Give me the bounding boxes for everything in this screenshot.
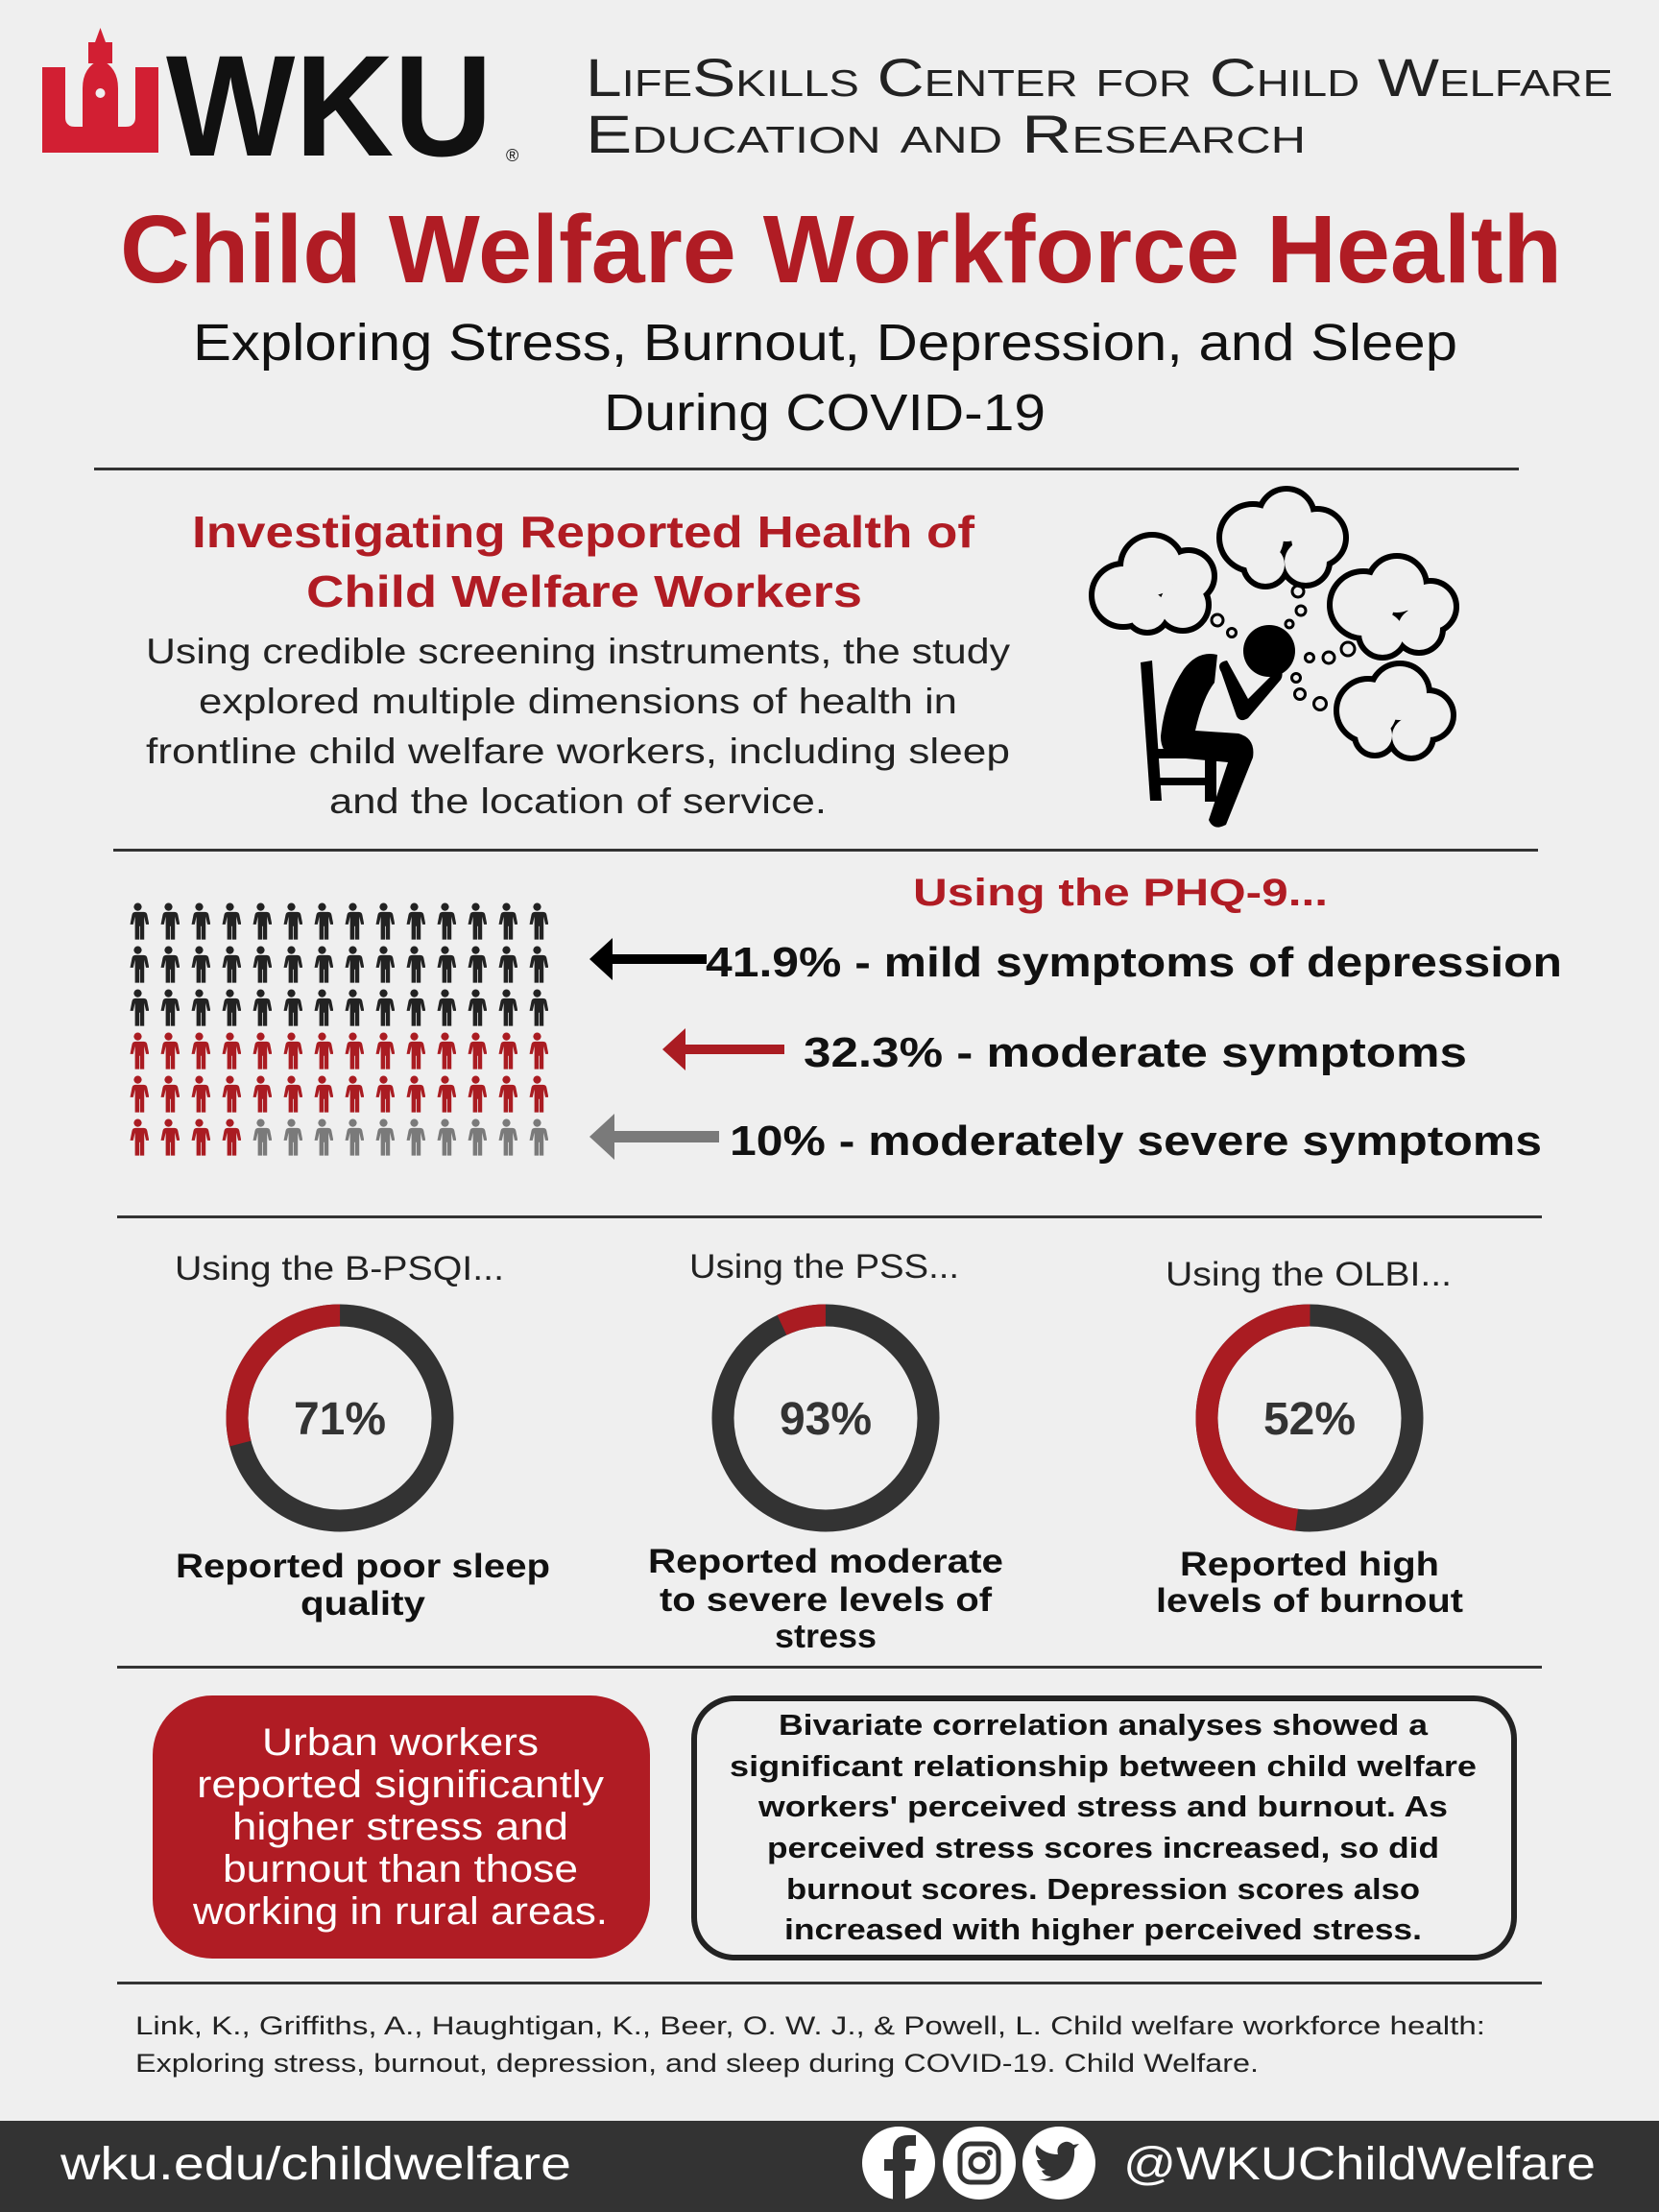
logo: WKU: ®	[506, 146, 518, 165]
icon: thinking person with clouds	[1094, 492, 1454, 828]
panel: sleep donut: 71%	[294, 1394, 386, 1445]
callout: urban workers	[153, 1695, 650, 1959]
subtitle	[193, 314, 1457, 442]
panel: burnout donut: Reported high	[1180, 1546, 1439, 1583]
citation	[135, 2011, 1485, 2078]
body text: and the location of service.	[329, 781, 827, 821]
body text	[146, 632, 1011, 821]
panel: sleep donut	[175, 1250, 550, 1623]
panel: burnout donut: Using the OLBI...	[1166, 1256, 1452, 1293]
body text: Using credible screening instruments, the study	[146, 632, 1011, 671]
panel: stress donut: Reported moderate	[648, 1543, 1003, 1580]
subtitle: Exploring Stress, Burnout, Depression, and Sleep	[193, 314, 1457, 372]
citation: Link, K., Griffiths, A., Haughtigan, K., Beer, O. W. J., & Powell, L. Child welfare workforce health:	[135, 2011, 1485, 2040]
title: Child Welfare Workforce Health	[120, 196, 1562, 303]
body text: frontline child welfare workers, including sleep	[146, 732, 1010, 771]
heading: PHQ-9: Using the PHQ-9...	[913, 872, 1328, 914]
footer bar: @WKUChildWelfare	[1123, 2139, 1596, 2190]
heading: investigating: Child Welfare Workers	[306, 566, 862, 616]
panel: stress donut: to severe levels of	[660, 1581, 992, 1619]
panel: stress donut: stress	[775, 1618, 877, 1655]
header: center name: LifeSkills Center for Child Welfare	[586, 47, 1613, 108]
panel: burnout donut: levels of burnout	[1156, 1582, 1463, 1620]
callout: urban workers: burnout than those	[223, 1848, 578, 1890]
icon: red tower logo	[42, 28, 158, 153]
callout: correlation: burnout scores. Depression scores also	[786, 1872, 1420, 1906]
logo: WKU: WKU	[166, 25, 493, 186]
panel: sleep donut: Reported poor sleep	[176, 1548, 550, 1585]
arrow: red	[662, 1028, 784, 1070]
stat: moderate: 32.3% - moderate symptoms	[804, 1029, 1467, 1076]
header: center name	[586, 47, 1613, 164]
callout: correlation: perceived stress scores increased, so did	[767, 1831, 1439, 1864]
callout: correlation: workers' perceived stress and burnout. As	[757, 1790, 1448, 1823]
citation: Exploring stress, burnout, depression, and sleep during COVID-19. Child Welfare.	[135, 2049, 1259, 2078]
callout: urban workers: Urban workers	[262, 1721, 539, 1764]
stat: mild: 41.9% - mild symptoms of depression	[706, 939, 1562, 986]
panel: sleep donut: quality	[301, 1585, 426, 1623]
icon: facebook	[862, 2127, 935, 2200]
callout: urban workers: higher stress and	[232, 1806, 568, 1848]
panel: sleep donut: Using the B-PSQI...	[175, 1250, 504, 1287]
footer bar	[0, 2121, 1659, 2212]
callout: correlation: increased with higher perceived stress.	[784, 1912, 1422, 1946]
arrow: black	[589, 938, 707, 980]
heading: investigating	[192, 507, 975, 616]
icon array: 84 people	[131, 903, 548, 1156]
panel: stress donut: Using the PSS...	[689, 1248, 959, 1286]
section: investigating health	[146, 507, 1011, 821]
callout: urban workers: reported significantly	[197, 1764, 604, 1806]
arrow: gray	[589, 1114, 719, 1160]
header: center name: Education and Research	[586, 104, 1306, 164]
callout: correlation: Bivariate correlation analyses showed a	[779, 1708, 1429, 1742]
heading: investigating: Investigating Reported Health of	[192, 507, 975, 557]
panel: burnout donut: 52%	[1263, 1394, 1356, 1445]
panel: burnout donut	[1156, 1256, 1463, 1620]
callout: urban workers: working in rural areas.	[192, 1890, 608, 1933]
footer bar: wku.edu/childwelfare	[60, 2139, 571, 2190]
icon: twitter	[1022, 2127, 1095, 2200]
subtitle: During COVID-19	[604, 384, 1046, 442]
stat: moderately severe: 10% - moderately severe symptoms	[730, 1118, 1542, 1165]
callout: correlation	[694, 1698, 1514, 1958]
icon: instagram	[943, 2127, 1016, 2200]
panel: stress donut: 93%	[780, 1394, 872, 1445]
callout: correlation: significant relationship between child welfare	[730, 1749, 1477, 1783]
body text: explored multiple dimensions of health in	[199, 682, 957, 721]
panel: stress donut	[648, 1248, 1003, 1655]
